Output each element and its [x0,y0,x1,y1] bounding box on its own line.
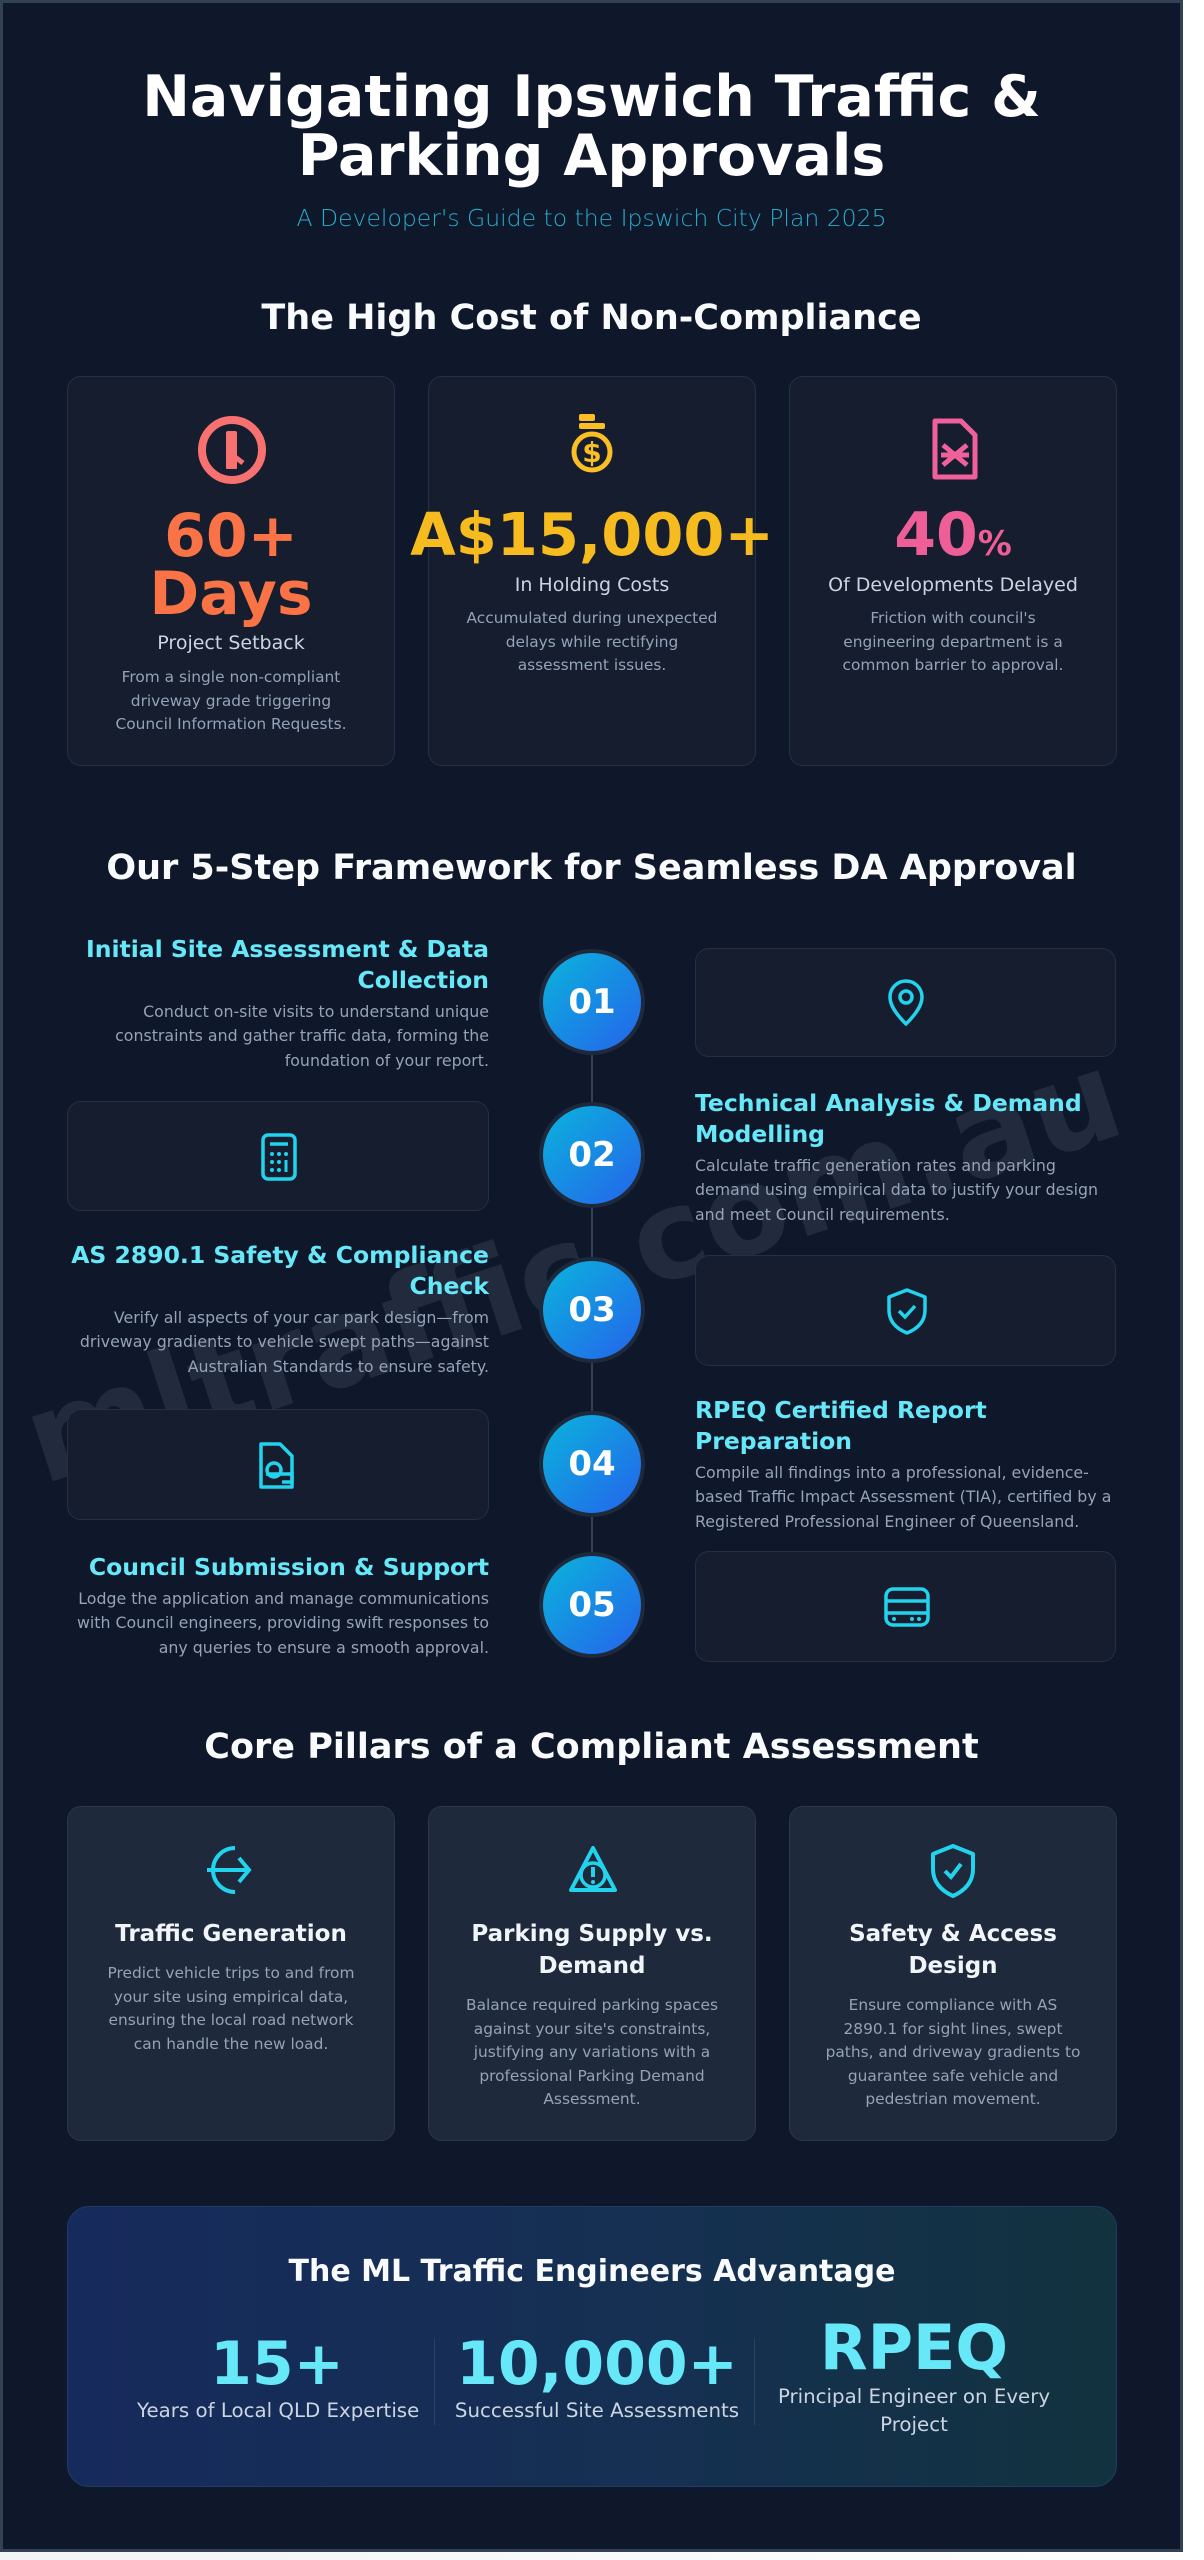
desc: pedestrian movement. [865,2090,1041,2108]
heading: core pillars: Core Pillars of a Compliant Assessment [204,1727,979,1767]
step 1 icon box [695,948,1116,1057]
desc: Balance required parking spaces [466,1996,718,2014]
step 2 circle [539,1102,645,1208]
desc: can handle the new load. [134,2034,328,2052]
step 3 icon box [695,1255,1116,1366]
pillar: safety access [789,1806,1117,2141]
desc: 2890.1 for sight lines, swept [843,2020,1062,2038]
desc: Friction with council's [870,609,1036,627]
step 3 text [71,1241,490,1376]
step 5 circle: 05 [568,1585,616,1625]
icon: money bag: $ [582,436,602,469]
panel: developments delayed [789,376,1117,766]
stat [149,501,313,629]
desc: assessment issues. [518,656,666,674]
title [849,1921,1057,1979]
stat: rpeq: Principal Engineer on Every [778,2385,1050,2408]
step 2 circle: 02 [568,1135,616,1175]
step 2 text: and meet Council requirements. [695,1204,950,1224]
desc: Council Information Requests. [116,715,346,733]
step 2 text: Modelling [695,1120,825,1148]
stat: 40% [894,500,1012,570]
step 2 text: Calculate traffic generation rates and parking [695,1156,1056,1174]
step 3 circle: 03 [568,1290,616,1330]
step 3 text: driveway gradients to vehicle swept paths—against [80,1332,489,1351]
step 2 text: Technical Analysis & Demand [695,1089,1082,1117]
step 1 text: constraints and gather traffic data, forming the [115,1026,489,1045]
step 3 text: Verify all aspects of your car park design—from [114,1308,489,1326]
subtitle: A Developer's Guide to the Ipswich City Plan 2025 [296,204,887,232]
title: Safety & Access [849,1921,1057,1947]
panel: holding costs [428,376,756,766]
desc: engineering department is a [843,632,1063,650]
desc [826,1996,1080,2108]
step 5 text: any queries to ensure a smooth approval. [159,1638,489,1656]
step 5 text [77,1553,489,1656]
title: Demand [538,1953,646,1979]
step 2 icon box [67,1101,489,1211]
step 4 circle: 04 [568,1444,616,1484]
step 4 text: RPEQ Certified Report [695,1396,987,1424]
step 4 icon box [67,1409,489,1520]
step 3 text: AS 2890.1 Safety & Compliance [71,1241,489,1269]
step 5 text: Lodge the application and manage communications [78,1588,489,1608]
step 4 circle [539,1411,645,1517]
label: Project Setback [157,632,305,654]
icon: warning triangle [569,1846,618,1892]
icon: alert clock [198,416,266,484]
desc: guarantee safe vehicle and [848,2066,1058,2084]
step 1 circle [539,949,645,1055]
step 4 text: based Traffic Impact Assessment (TIA), certified by a [695,1487,1111,1506]
step 4 text [695,1396,1111,1530]
stat: rpeq: RPEQ [820,2311,1008,2384]
desc: Assessment. [543,2090,641,2108]
step 3 circle [539,1257,645,1363]
desc: delays while rectifying [506,632,678,650]
pillar: traffic generation [67,1806,395,2141]
step 3 text: Check [410,1272,489,1300]
heading: high cost: The High Cost of Non-Compliance [261,298,922,338]
title: Parking Approvals [298,123,885,189]
stat: A$15,000+ [410,500,774,569]
step 4 text: Preparation [695,1427,852,1455]
stat: rpeq [778,2311,1050,2436]
desc: Predict vehicle trips to and from [108,1964,354,1982]
step 4 text: Compile all findings into a professional, evidence- [695,1462,1089,1482]
desc: against your site's constraints, [474,2020,710,2038]
step 4 text: Registered Professional Engineer of Queensland. [695,1512,1079,1530]
desc: paths, and driveway gradients to [826,2043,1080,2061]
step 5 circle [539,1552,645,1658]
step 1 text: Conduct on-site visits to understand unique [143,1002,489,1020]
panel: 60+ days [67,376,395,766]
desc: Ensure compliance with AS [849,1996,1057,2014]
stat: 60+ [164,501,298,571]
step 2 text [695,1089,1098,1224]
step 5 text: with Council engineers, providing swift responses to [77,1613,489,1632]
desc [843,609,1063,674]
stat: years: Years of Local QLD Expertise [137,2399,419,2422]
desc [466,609,717,674]
title: Parking Supply vs. [471,1921,713,1947]
watermark: mltraffic.com.au [8,1023,1138,1513]
heading: framework: Our 5-Step Framework for Seamless DA Approval [106,848,1077,888]
step 1 circle: 01 [568,982,616,1022]
step 1 text: foundation of your report. [285,1050,489,1070]
desc [108,1964,354,2052]
title [471,1921,713,1979]
icon: money bag [572,414,612,472]
desc: ensuring the local road network [109,2011,353,2029]
divider [434,2339,435,2425]
desc: Accumulated during unexpected [467,609,717,627]
stat: assessments: 10,000+ [456,2329,738,2399]
desc: driveway grade triggering [131,692,331,710]
desc: professional Parking Demand [479,2066,705,2084]
desc: common barrier to approval. [843,656,1063,674]
desc [116,668,346,733]
label: Of Developments Delayed [828,574,1078,596]
stat: years: 15+ [210,2329,344,2399]
step 1 text [86,935,489,1070]
step 2 text: demand using empirical data to justify your design [695,1180,1098,1199]
step 3 text: Australian Standards to ensure safety. [188,1356,489,1376]
stat: Days [149,559,313,629]
pillar: parking supply [428,1806,756,2141]
title: Traffic Generation [115,1921,347,1947]
step 1 text: Initial Site Assessment & Data [86,935,489,963]
title [142,64,1041,189]
step 5 text: Council Submission & Support [89,1553,489,1581]
stat: years [137,2329,419,2422]
desc: From a single non-compliant [122,668,340,686]
label: In Holding Costs [515,574,669,596]
icon: document x [932,418,978,480]
panel: advantage [67,2206,1117,2487]
title: Design [908,1953,998,1979]
desc: justifying any variations with a [474,2043,710,2061]
title: Navigating Ipswich Traffic & [142,64,1041,130]
divider [754,2339,755,2425]
desc [466,1996,718,2108]
stat: rpeq: Project [880,2413,948,2436]
step 5 icon box [695,1551,1116,1662]
icon: arrow arc [207,1846,252,1894]
timeline line [591,1003,593,1608]
stat: assessments: Successful Site Assessments [455,2399,739,2422]
icon: shield [931,1844,975,1898]
step 1 text: Collection [357,966,489,994]
heading: The ML Traffic Engineers Advantage [289,2254,895,2289]
desc: your site using empirical data, [114,1988,348,2006]
